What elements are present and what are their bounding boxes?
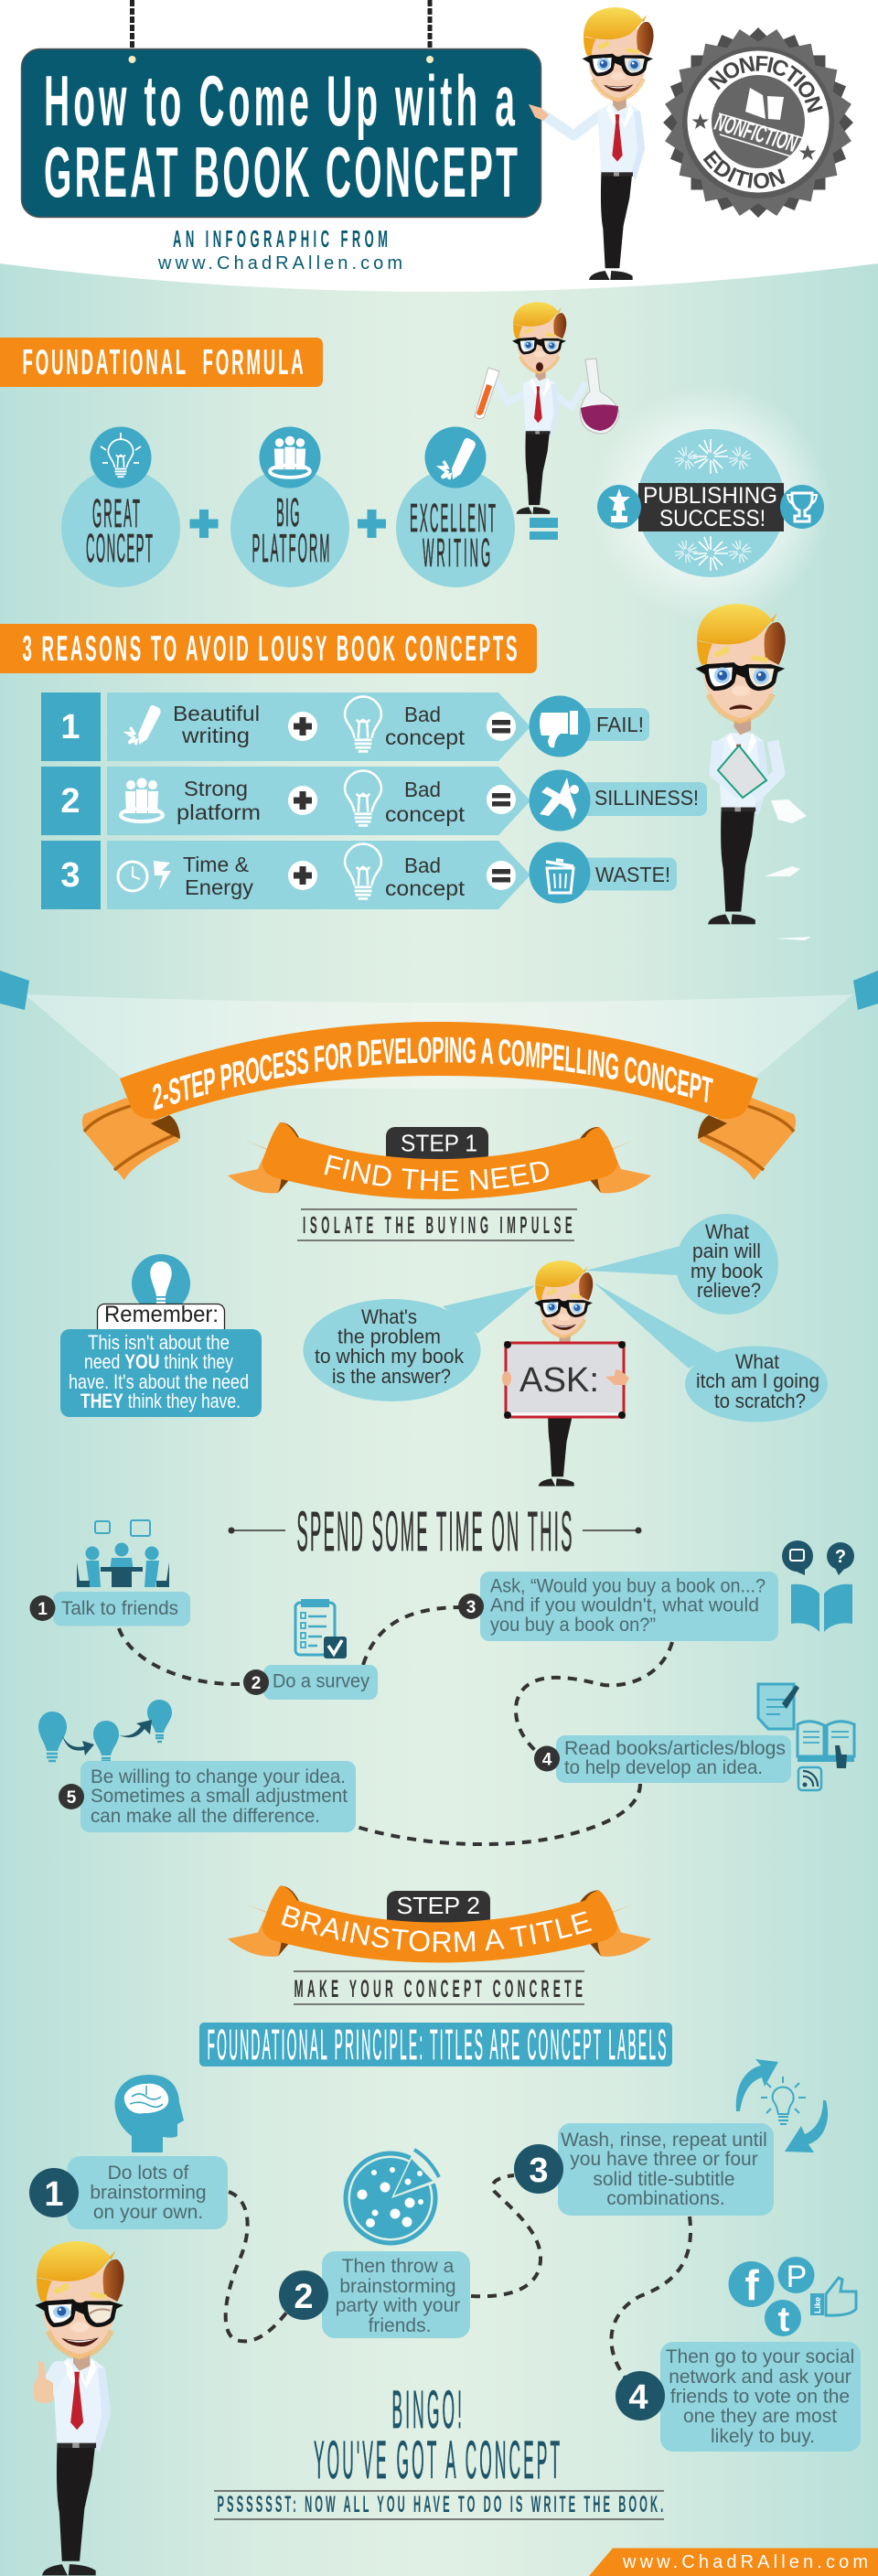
result: fail: FAIL! xyxy=(596,713,644,736)
step 1: talk to friends: Talk to friends xyxy=(61,1598,178,1619)
publishing success circle: PUBLISHING xyxy=(643,483,777,509)
step 1: talk to friends xyxy=(29,1592,190,1626)
footer url tag xyxy=(589,2549,878,2576)
chains holding title sign xyxy=(132,0,430,60)
formula item: excellent writing: EXCELLENT xyxy=(410,496,496,540)
character: winking man with thumbs up xyxy=(34,2241,124,2575)
icon: changing light bulbs xyxy=(38,1700,172,1765)
open eye and wink xyxy=(53,2306,111,2318)
step 5: be willing to change: can make all the difference. xyxy=(91,1806,320,1827)
character: man with lab flasks xyxy=(475,302,619,514)
speech bubble: pain: relieve? xyxy=(697,1279,761,1302)
title line 1: How to Come Up with a xyxy=(44,61,515,142)
brainstorm step 2 xyxy=(279,2251,470,2338)
step 1 banner xyxy=(228,1122,651,1199)
result: waste xyxy=(529,842,677,904)
reason row 1: Beautiful xyxy=(173,702,260,725)
reason row 1 xyxy=(41,692,649,761)
ask board: ASK: xyxy=(519,1361,599,1400)
icon: social networks: Like xyxy=(813,2297,822,2313)
icon: social networks xyxy=(728,2257,856,2339)
tablet xyxy=(718,746,766,798)
step 5: be willing to change: 5 xyxy=(67,1788,77,1808)
reason row 3: 3 xyxy=(60,856,80,895)
reason row 2: platform xyxy=(177,800,261,824)
reason row 3: Energy xyxy=(185,875,254,899)
brainstorm step 4: network and ask your xyxy=(669,2367,851,2388)
reason row 3: Bad xyxy=(404,853,441,877)
step 2 banner xyxy=(228,1886,651,1963)
subheading: isolate the buying impulse: ISOLATE THE BUYING IMPULSE xyxy=(303,1213,573,1239)
brainstorm step 1 xyxy=(29,2156,228,2229)
reason row 2: concept xyxy=(385,802,466,826)
step 2: do a survey: 2 xyxy=(252,1674,261,1693)
speech bubble: problem: the problem xyxy=(337,1325,441,1348)
speech bubble: itch: itch am I going xyxy=(696,1369,819,1392)
formula item: big platform xyxy=(230,426,349,587)
formula item: great concept: CONCEPT xyxy=(86,526,153,570)
byline xyxy=(157,226,402,274)
speech bubble: itch: What xyxy=(735,1350,779,1373)
step 2 banner: BRAINSTORM A TITLE xyxy=(282,1905,592,1952)
formula item: great concept: GREAT xyxy=(92,491,140,535)
remember callout: This isn't about the xyxy=(88,1331,230,1354)
remember callout: THEY think they have. xyxy=(80,1390,241,1412)
publishing success circle: SUCCESS! xyxy=(659,506,766,531)
main ribbon banner xyxy=(82,1022,796,1180)
step 2: do a survey xyxy=(243,1665,378,1700)
remember callout: need YOU think they xyxy=(84,1350,233,1373)
step 3: ask xyxy=(458,1572,778,1641)
result: silliness: SILLINESS! xyxy=(594,786,699,810)
dashed connector: steps 1 to 5 xyxy=(119,1607,672,1844)
character: man holding ask sign xyxy=(502,1261,629,1487)
brainstorm step 4: 4 xyxy=(628,2378,648,2417)
reason row 1: writing xyxy=(181,724,250,747)
step 4: read books: Read books/articles/blogs xyxy=(564,1738,786,1759)
brainstorm step 4: likely to buy. xyxy=(711,2426,815,2447)
icon: social networks: P xyxy=(787,2259,807,2294)
icon: open book with question bubbles: ? xyxy=(835,1547,846,1567)
reason row 2: 2 xyxy=(60,782,80,821)
brainstorm step 2: 2 xyxy=(294,2278,314,2316)
badge: nonfiction edition: EDITION xyxy=(702,150,785,188)
brainstorm step 3: 3 xyxy=(529,2152,549,2190)
brainstorm step 4: Then go to your social xyxy=(666,2346,854,2367)
reason row 3: Time & xyxy=(183,853,249,876)
brainstorm step 2: friends. xyxy=(369,2315,431,2336)
step 1 banner: STEP 1 xyxy=(401,1129,477,1156)
plus sign xyxy=(358,510,386,538)
formula item: excellent writing: WRITING xyxy=(423,531,490,574)
remember callout: Remember: xyxy=(104,1302,219,1327)
badge: nonfiction edition: NONFICTION xyxy=(708,56,823,113)
closing text: bingo xyxy=(314,2381,560,2491)
reason row 1: concept xyxy=(385,725,466,749)
speech bubble: itch: to scratch? xyxy=(714,1390,806,1412)
reason row 1: Bad xyxy=(404,703,441,726)
character: pointing man xyxy=(529,7,654,280)
dashed connector: brainstorm steps xyxy=(226,2175,691,2378)
character: sad man with tablet xyxy=(695,604,811,940)
brainstorm step 4: one they are most xyxy=(683,2406,837,2427)
brainstorm step 4: friends to vote on the xyxy=(670,2386,850,2408)
step 4: read books: to help develop an idea. xyxy=(564,1757,763,1778)
result: silliness xyxy=(529,770,707,831)
speech bubble: itch xyxy=(594,1283,828,1422)
formula item: big platform: PLATFORM xyxy=(252,526,329,570)
step 1 banner: FIND THE NEED xyxy=(324,1154,549,1191)
brainstorm step 2: brainstorming xyxy=(339,2276,456,2297)
plus sign xyxy=(190,510,218,538)
step 3: ask: you buy a book on?” xyxy=(490,1615,656,1636)
step 5: be willing to change: Sometimes a small adjustment xyxy=(91,1786,348,1807)
icon: pizza xyxy=(346,2150,439,2243)
brainstorm step 3: solid title-subtitle xyxy=(593,2169,735,2190)
brainstorm step 1: Do lots of xyxy=(108,2163,189,2184)
badge: nonfiction edition: NONFICTION xyxy=(712,108,800,157)
closing note: PSSSSSST: NOW ALL YOU HAVE TO DO IS WRITE THE BOOK. xyxy=(218,2492,663,2517)
closing text: bingo: BINGO! xyxy=(391,2381,462,2441)
flying papers xyxy=(765,800,811,940)
reason row 2 xyxy=(41,767,707,835)
title sign xyxy=(22,49,541,218)
heading bar: foundational formula: FOUNDATIONAL FORMULA xyxy=(22,343,304,382)
brainstorm step 1: brainstorming xyxy=(90,2183,207,2203)
flask xyxy=(580,359,619,434)
speech bubble: problem: is the answer? xyxy=(332,1365,451,1388)
step 3: ask: 3 xyxy=(466,1598,476,1617)
step 2 banner: STEP 2 xyxy=(397,1892,480,1919)
speech bubble: pain: What xyxy=(705,1220,749,1243)
speech bubble: pain: my book xyxy=(691,1260,764,1283)
footer url tag: www.ChadRAllen.com xyxy=(622,2552,868,2572)
step 3: ask: Ask, “Would you buy a book on...? xyxy=(490,1575,766,1597)
spotlights xyxy=(0,971,878,1089)
icon: friends at table xyxy=(77,1520,169,1587)
heading: spend some time on this xyxy=(229,1499,642,1563)
step 1: talk to friends: 1 xyxy=(37,1600,48,1619)
brainstorm step 3 xyxy=(514,2123,774,2216)
test tube xyxy=(475,368,499,419)
icon: open book with question bubbles xyxy=(782,1540,854,1632)
result: fail xyxy=(529,695,649,757)
ask board xyxy=(502,1341,629,1419)
equals sign xyxy=(530,518,558,540)
publishing success circle xyxy=(593,384,830,622)
step 4: read books: 4 xyxy=(542,1751,552,1769)
step 5: be willing to change: Be willing to change your idea. xyxy=(91,1766,346,1787)
speech bubble: problem: What's xyxy=(361,1305,417,1328)
icon: clock and bolt xyxy=(118,861,171,891)
formula item: big platform: BIG xyxy=(276,490,300,534)
remember callout: have. It's about the need xyxy=(69,1370,249,1393)
icon: survey clipboard xyxy=(295,1599,347,1658)
remember callout xyxy=(60,1254,262,1417)
formula item: excellent writing xyxy=(396,426,515,587)
result: waste: WASTE! xyxy=(595,863,670,886)
icon: light bulb xyxy=(132,1254,190,1313)
brainstorm step 2: party with your xyxy=(336,2295,460,2316)
heading bar: 3 reasons: 3 REASONS TO AVOID LOUSY BOOK CONCEPTS xyxy=(22,629,517,669)
badge: nonfiction edition xyxy=(663,27,853,218)
main ribbon banner: 2-STEP PROCESS FOR DEVELOPING A COMPELLING CONCEPT xyxy=(153,1037,713,1111)
icon: trophy cup xyxy=(780,485,824,529)
title line 2: GREAT BOOK CONCEPT xyxy=(44,133,518,213)
step 4: read books xyxy=(534,1735,791,1783)
brainstorm step 4 xyxy=(616,2342,861,2452)
speech bubble: problem xyxy=(304,1285,535,1401)
speech bubble: pain xyxy=(585,1214,778,1315)
closing text: bingo: YOU'VE GOT A CONCEPT xyxy=(314,2431,560,2491)
byline: AN INFOGRAPHIC FROM xyxy=(173,226,388,252)
heading: spend some time on this: SPEND SOME TIME ON THIS xyxy=(296,1499,572,1563)
brainstorm step 1: on your own. xyxy=(93,2202,203,2223)
speech bubble: problem: to which my book xyxy=(315,1345,465,1368)
icon: head with brain xyxy=(114,2075,184,2152)
icon: star trophy xyxy=(597,485,641,529)
principle banner: FOUNDATIONAL PRINCIPLE: TITLES ARE CONCEPT LABELS xyxy=(207,2022,666,2069)
icon: repeat arrows and bulb xyxy=(736,2059,828,2152)
formula item: great concept xyxy=(61,426,180,587)
icon: social networks: f xyxy=(744,2261,759,2309)
subheading: make your concept concrete: MAKE YOUR CONCEPT CONCRETE xyxy=(294,1976,583,2002)
white header area xyxy=(0,0,878,292)
brainstorm step 1: 1 xyxy=(44,2175,64,2214)
step 5: be willing to change xyxy=(59,1761,356,1832)
reason row 1: 1 xyxy=(60,708,80,746)
brainstorm step 3: combinations. xyxy=(606,2188,725,2209)
brainstorm step 3: you have three or four xyxy=(570,2149,758,2170)
step 2: do a survey: Do a survey xyxy=(273,1670,369,1692)
reason row 3: concept xyxy=(385,876,466,900)
icon: social networks: t xyxy=(778,2301,790,2339)
heading bar: foundational formula xyxy=(0,338,323,387)
icon: document, book and rss xyxy=(758,1684,854,1790)
byline: www.ChadRAllen.com xyxy=(157,253,402,274)
reason row 2: Bad xyxy=(404,778,441,801)
reason row 3 xyxy=(41,841,677,909)
reason row 2: Strong xyxy=(184,777,248,800)
step 3: ask: And if you wouldn't, what would xyxy=(490,1594,759,1615)
brainstorm step 3: Wash, rinse, repeat until xyxy=(561,2130,767,2151)
brainstorm step 2: Then throw a xyxy=(342,2256,455,2277)
speech bubble: pain: pain will xyxy=(692,1240,761,1262)
